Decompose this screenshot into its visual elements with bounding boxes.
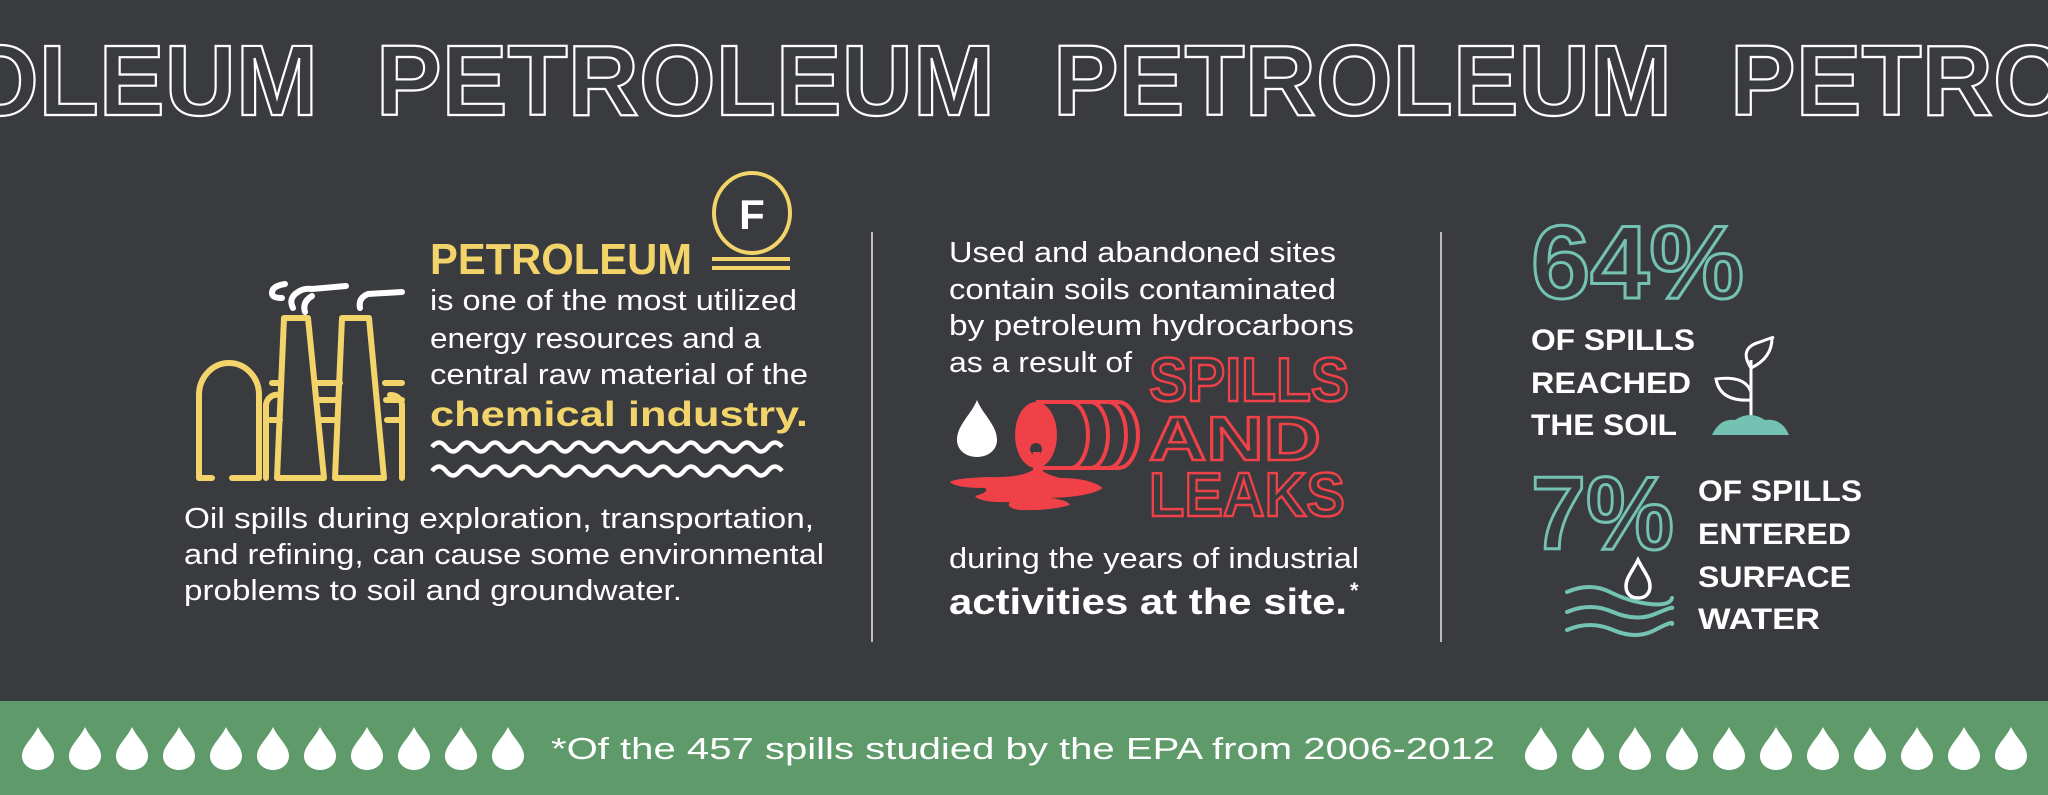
text block: during years: activities at the site. [949,581,1347,622]
text block: used sites: Used and abandoned sites [949,237,1336,269]
text block: during years: * [1350,578,1359,603]
icons: left drops [22,727,524,770]
text: reached the soil: THE SOIL [1531,409,1677,442]
panel: statistics [1531,205,1862,636]
icon: sprout [1712,338,1789,435]
text block: description: central raw material of the [430,359,808,391]
heading: SPILLS AND LEAKS: AND [1149,405,1321,474]
title: petroleum outline banner [0,25,2048,137]
title: petroleum outline banner: PETROLEUM [376,25,995,137]
text: entered surface water: SURFACE [1698,561,1851,594]
heading: SPILLS AND LEAKS: SPILLS [1149,346,1349,415]
text block: used sites: contain soils contaminated [949,274,1336,306]
icon: spilled barrel [950,402,1138,510]
text: reached the soil [1531,324,1695,442]
text block: description [430,285,808,434]
panel: spills and leaks [949,237,1359,622]
text: entered surface water: WATER [1698,603,1820,636]
text block: oil spills: and refining, can cause some environmental [184,539,824,571]
text: entered surface water [1698,475,1862,636]
icon: water with drop [1567,560,1672,635]
text block: description: energy resources and a [430,323,762,355]
text: entered surface water: OF SPILLS [1698,475,1862,508]
text: reached the soil: OF SPILLS [1531,324,1695,357]
icon: F circle: F [739,191,765,238]
text block: description: is one of the most utilized [430,285,797,317]
text block: during years [949,543,1359,622]
footer band [0,701,2048,795]
icon: factory [199,318,402,478]
text block: oil spills: Oil spills during exploration, transportation, [184,503,814,535]
waves [432,442,782,476]
title: petroleum outline banner: PETROLEUM [1053,25,1672,137]
icons: right drops [1525,727,2027,770]
text block: oil spills: problems to soil and groundwater. [184,575,682,607]
text: reached the soil: REACHED [1531,367,1691,400]
text block: during years: during the years of industrial [949,543,1359,575]
icon: white drop [957,400,997,457]
icon: smoke [272,284,402,312]
icon: F circle [712,173,790,270]
footnote text: *Of the 457 spills studied by the EPA from 2006-2012 [551,731,1495,766]
heading: SPILLS AND LEAKS [1149,346,1349,530]
stat: 7%: 7% [1531,456,1674,572]
text block: description: chemical industry. [430,395,808,434]
text block: oil spills [184,503,824,607]
text: entered surface water: ENTERED [1698,518,1851,551]
text block: used sites [949,237,1354,379]
heading: SPILLS AND LEAKS: LEAKS [1149,461,1345,530]
stat: 64%: 64% [1531,205,1744,321]
text block: used sites: as a result of [949,347,1133,379]
panel: petroleum intro [184,173,824,607]
heading: PETROLEUM: PETROLEUM [430,235,692,284]
text block: used sites: by petroleum hydrocarbons [949,310,1354,342]
